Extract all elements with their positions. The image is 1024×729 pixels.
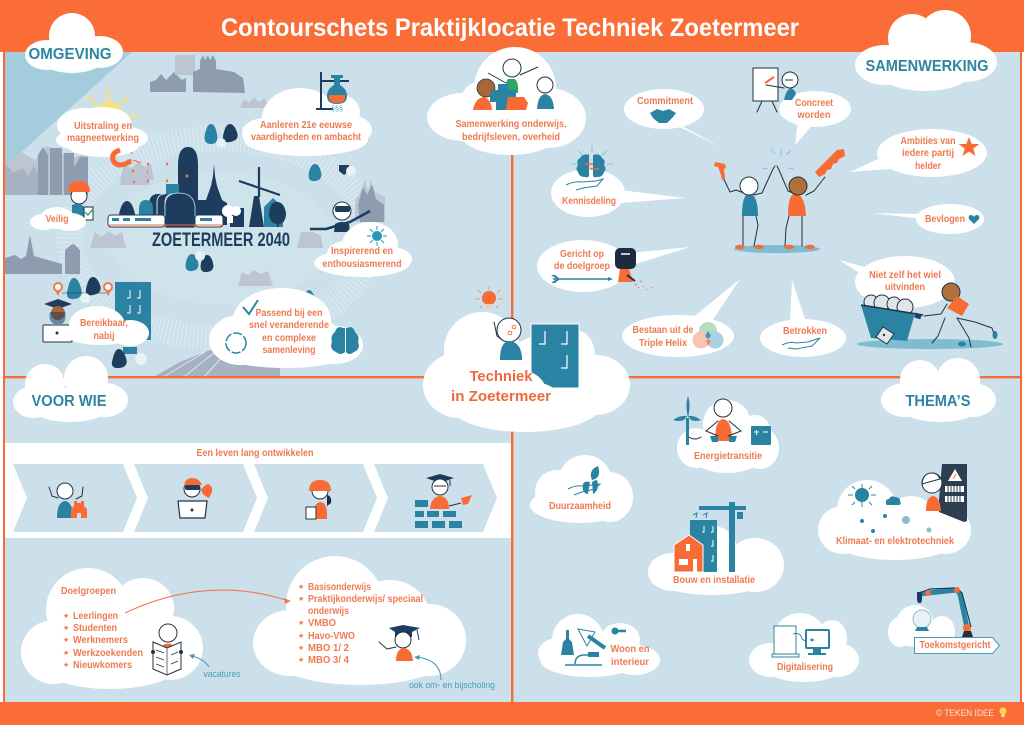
figure: veilig: [68, 181, 93, 220]
arrow: [551, 275, 613, 283]
bubble: concreet worden: Concreet: [795, 98, 834, 109]
cloud: inspirerend: [314, 222, 412, 277]
bubble: bevlogen: [872, 204, 984, 234]
bubble: betrokken: [760, 280, 846, 357]
figure: graduate bricklayer: [415, 474, 472, 528]
cloud: bereikbaar: nabij: [94, 331, 115, 342]
heading: voor wie: VOOR WIE: [32, 393, 107, 410]
cloud: passend: [209, 288, 363, 368]
figure: thinking person: [494, 318, 522, 360]
bubble: concreet worden: [779, 91, 851, 145]
heading: samenwerking: SAMENWERKING: [866, 58, 988, 75]
skyline: left church: [5, 235, 80, 274]
cloud: opleidingen: [253, 556, 466, 685]
cloud: opleidingen: onderwijs: [308, 606, 349, 617]
cloud: opleidingen: MBO 3/ 4: [308, 655, 349, 666]
icon: building: [115, 282, 151, 340]
cloud: opleidingen: Havo-VWO: [308, 631, 355, 642]
bubble: betrokken: Betrokken: [783, 326, 827, 337]
cloud: bereikbaar: Bereikbaar,: [80, 318, 128, 329]
cloud: uitstraling: Uitstraling en: [74, 121, 132, 132]
cloud: passend: samenleving: [262, 345, 316, 356]
cloud: digitalisering: [749, 613, 859, 682]
cloud: opleidingen: ★: [298, 632, 304, 640]
bubble: triple helix: Bestaan uit de: [632, 325, 694, 336]
text: een leven lang ontwikkelen: Een leven lang ontwikkelen: [196, 448, 314, 459]
cloud: aanleren: vaardigheden en ambacht: [251, 132, 362, 143]
title bar: [0, 0, 1024, 52]
cloud: bouw en installatie: Bouw en installatie: [673, 575, 755, 586]
cloud: samenwerking onderwijs: Samenwerking onderwijs,: [456, 119, 567, 130]
cloud: opleidingen: ★: [298, 619, 304, 627]
cloud: opleidingen: ★: [298, 595, 304, 603]
icon: brain and rays: [572, 146, 613, 177]
bubble: commitment: Commitment: [637, 96, 694, 107]
skyline: left city: [5, 146, 88, 195]
cloud: passend: Passend bij een: [256, 308, 322, 319]
bubble: ambities: iedere partij: [902, 148, 954, 159]
icon: building: [531, 324, 579, 388]
white strip: [5, 443, 511, 538]
figure: girl with laptop: [178, 478, 212, 518]
note: vacatures: vacatures: [204, 669, 241, 680]
cloud: digitalisering: Digitalisering: [777, 662, 833, 673]
icon: robot arm and crystal ball: [913, 587, 973, 637]
icon: sun: [88, 88, 138, 125]
heading: omgeving: [25, 13, 123, 73]
figure: graduate: [379, 625, 420, 661]
icon: tools: [561, 628, 626, 665]
icon: leaves in hand: [568, 466, 600, 495]
cloud: aanleren: Aanleren 21e eeuwse: [260, 120, 352, 131]
zoetermeer 2040 skyline: ZOETERMEER 2040: [152, 230, 290, 251]
cloud: inspirerend: Inspirerend en: [331, 246, 393, 257]
figure: inspirerend robot: [310, 202, 370, 232]
bubble: gericht op de doelgroep: Gericht op: [560, 249, 604, 260]
icon: flipchart presenter: [753, 68, 798, 112]
figure: reading newspaper: [151, 624, 183, 675]
bubble: kennisdeling: [551, 146, 685, 217]
trees: [112, 124, 356, 368]
icon: windmill: [239, 167, 280, 227]
central cloud: techniek in zoetermeer: [423, 286, 630, 432]
bubble: niet zelf het wiel uitvinden: [839, 256, 955, 308]
cloud: doelgroepen: Werkzoekenden: [73, 648, 143, 659]
cloud: toekomstgericht: [888, 587, 1000, 654]
cloud: uitstraling: [56, 107, 148, 157]
bubble: gericht op de doelgroep: [537, 240, 690, 292]
cloud: opleidingen: VMBO: [308, 618, 336, 629]
cloud: opleidingen: Praktijkonderwijs/ speciaal: [308, 594, 423, 605]
icon: sun small: [367, 226, 387, 246]
bubble: ambities: [850, 129, 987, 177]
label arrow: toekomstgericht: Toekomstgericht: [920, 640, 991, 651]
figures: puzzle team: [473, 59, 554, 110]
icon: flask: [316, 72, 349, 113]
figure: child with blocks: [49, 483, 87, 518]
cloud: veilig: Veilig: [46, 214, 68, 225]
cloud: doelgroepen: ★: [63, 612, 69, 620]
icon: flask: §§§: [331, 106, 343, 113]
heading: samenwerking: [855, 10, 997, 91]
cloud: opleidingen: Basisonderwijs: [308, 582, 371, 593]
cloud: doelgroepen: ★: [63, 661, 69, 669]
icon: cycle: [226, 333, 246, 353]
central cloud: techniek in zoetermeer: in Zoetermeer: [451, 388, 551, 405]
cloud: opleidingen: ★: [298, 583, 304, 591]
icon: wind turbine: [673, 396, 701, 445]
icon: battery: [751, 426, 771, 445]
heading: thema's: THEMA’S: [906, 393, 971, 410]
central cloud: techniek in zoetermeer: Techniek: [470, 368, 533, 385]
icon: magnet: [113, 150, 168, 185]
cloud: inspirerend: enthousiasmerend: [322, 259, 402, 270]
footer bar: [0, 702, 1024, 725]
cloud: samenwerking onderwijs: bedrijfsleven, overheid: [462, 132, 560, 143]
skyline: right church: [355, 180, 385, 222]
cloud: doelgroepen: Studenten: [73, 623, 117, 634]
cloud: doelgroepen: ★: [63, 636, 69, 644]
panel: voor wie: [5, 356, 511, 691]
bubble: kennisdeling: Kennisdeling: [562, 196, 616, 207]
cloud: energietransitie: [673, 396, 779, 473]
icon: brain: [331, 327, 359, 354]
bubble: niet zelf het wiel uitvinden: Niet zelf het wiel: [869, 270, 941, 281]
cloud: opleidingen: MBO 1/ 2: [308, 643, 349, 654]
cloud: uitstraling: magneetwerking: [67, 133, 139, 144]
note: ook om- en bijscholing: [409, 655, 495, 691]
bubble: gericht op de doelgroep: de doelgroep: [554, 261, 610, 272]
icon: check: [243, 300, 258, 314]
heading: thema's: [881, 358, 996, 422]
cloud: bouw en installatie: [648, 502, 784, 595]
panel: samenwerking: [537, 10, 1003, 357]
icon: weather: [848, 484, 932, 533]
figure: high five: [714, 149, 845, 253]
panel: thema's: [530, 358, 1000, 682]
cloud: doelgroepen: Nieuwkomers: [73, 660, 132, 671]
bubble: triple helix: [622, 279, 740, 357]
cloud: doelgroepen: ★: [63, 649, 69, 657]
cloud: woon en interieur: Woon en: [610, 644, 650, 655]
icon: location pins and trees: [54, 277, 112, 303]
radial burst: [70, 138, 370, 338]
bubble: niet zelf het wiel uitvinden: uitvinden: [885, 282, 925, 293]
icon: lightbulb: [475, 286, 503, 308]
icon: venn: [692, 322, 724, 348]
cloud: duurzaamheid: [530, 455, 633, 523]
cloud: klimaat- en elektrotechniek: Klimaat- en elektrotechniek: [836, 536, 954, 547]
chevrons: [13, 464, 497, 532]
note: vacatures: [189, 654, 241, 680]
panel: omgeving: [5, 13, 412, 376]
zoetermeer 2040 skyline: [108, 147, 290, 251]
cloud: energietransitie: Energietransitie: [694, 451, 762, 462]
cloud: woon en interieur: interieur: [611, 657, 649, 668]
title bar: Contourschets Praktijklocatie Techniek Zoetermeer: [221, 14, 799, 42]
skyline: top castle: [150, 55, 245, 93]
figure: welder: [615, 248, 653, 290]
figure: student with laptop: [43, 299, 72, 342]
note: ook om- en bijscholing: ook om- en bijscholing: [409, 680, 495, 691]
cloud: opleidingen: ★: [298, 644, 304, 652]
bubble: triple helix: Triple Helix: [639, 338, 687, 349]
skyline: small silhouettes: [90, 97, 323, 286]
heading: voor wie: [13, 356, 128, 422]
figure: energy person: [689, 399, 741, 442]
bubble: concreet worden: worden: [797, 110, 830, 121]
cloud: doelgroepen: Doelgroepen: [61, 586, 116, 597]
heading: omgeving: OMGEVING: [28, 46, 112, 63]
cloud: passend: en complexe: [262, 333, 316, 344]
figure: wheelbarrow pusher: [857, 283, 1003, 349]
cloud: aanleren: [242, 88, 372, 156]
bubble: commitment: [624, 89, 721, 147]
arrow: doelgroepen to opleidingen: [125, 590, 291, 613]
cloud: opleidingen: ★: [298, 656, 304, 664]
cloud: veilig: [30, 207, 86, 231]
footer bar: © TEKEN IDEE: [936, 708, 994, 719]
icon: scroll to screen: [772, 626, 829, 657]
cloud: klimaat- en elektrotechniek: [818, 464, 971, 560]
cloud: doelgroepen: [21, 568, 203, 689]
cloud: woon en interieur: [538, 614, 660, 677]
bubble: bevlogen: Bevlogen: [925, 214, 965, 225]
bridge skyline: [155, 350, 280, 376]
cloud: passend: snel veranderende: [249, 320, 329, 331]
bubble: ambities: Ambities van: [900, 136, 956, 147]
figure: technician with tablet: [306, 480, 331, 519]
cloud: samenwerking onderwijs: [427, 47, 586, 155]
figure: electrician with panel: [922, 464, 967, 522]
cloud: doelgroepen: Werknemers: [73, 635, 128, 646]
icon: building and crane: [674, 502, 746, 572]
cloud: doelgroepen: Leerlingen: [73, 611, 118, 622]
bubble: ambities: helder: [915, 161, 941, 172]
cloud: bereikbaar: [68, 306, 149, 346]
cloud: duurzaamheid: Duurzaamheid: [549, 501, 611, 512]
cloud: doelgroepen: ★: [63, 624, 69, 632]
